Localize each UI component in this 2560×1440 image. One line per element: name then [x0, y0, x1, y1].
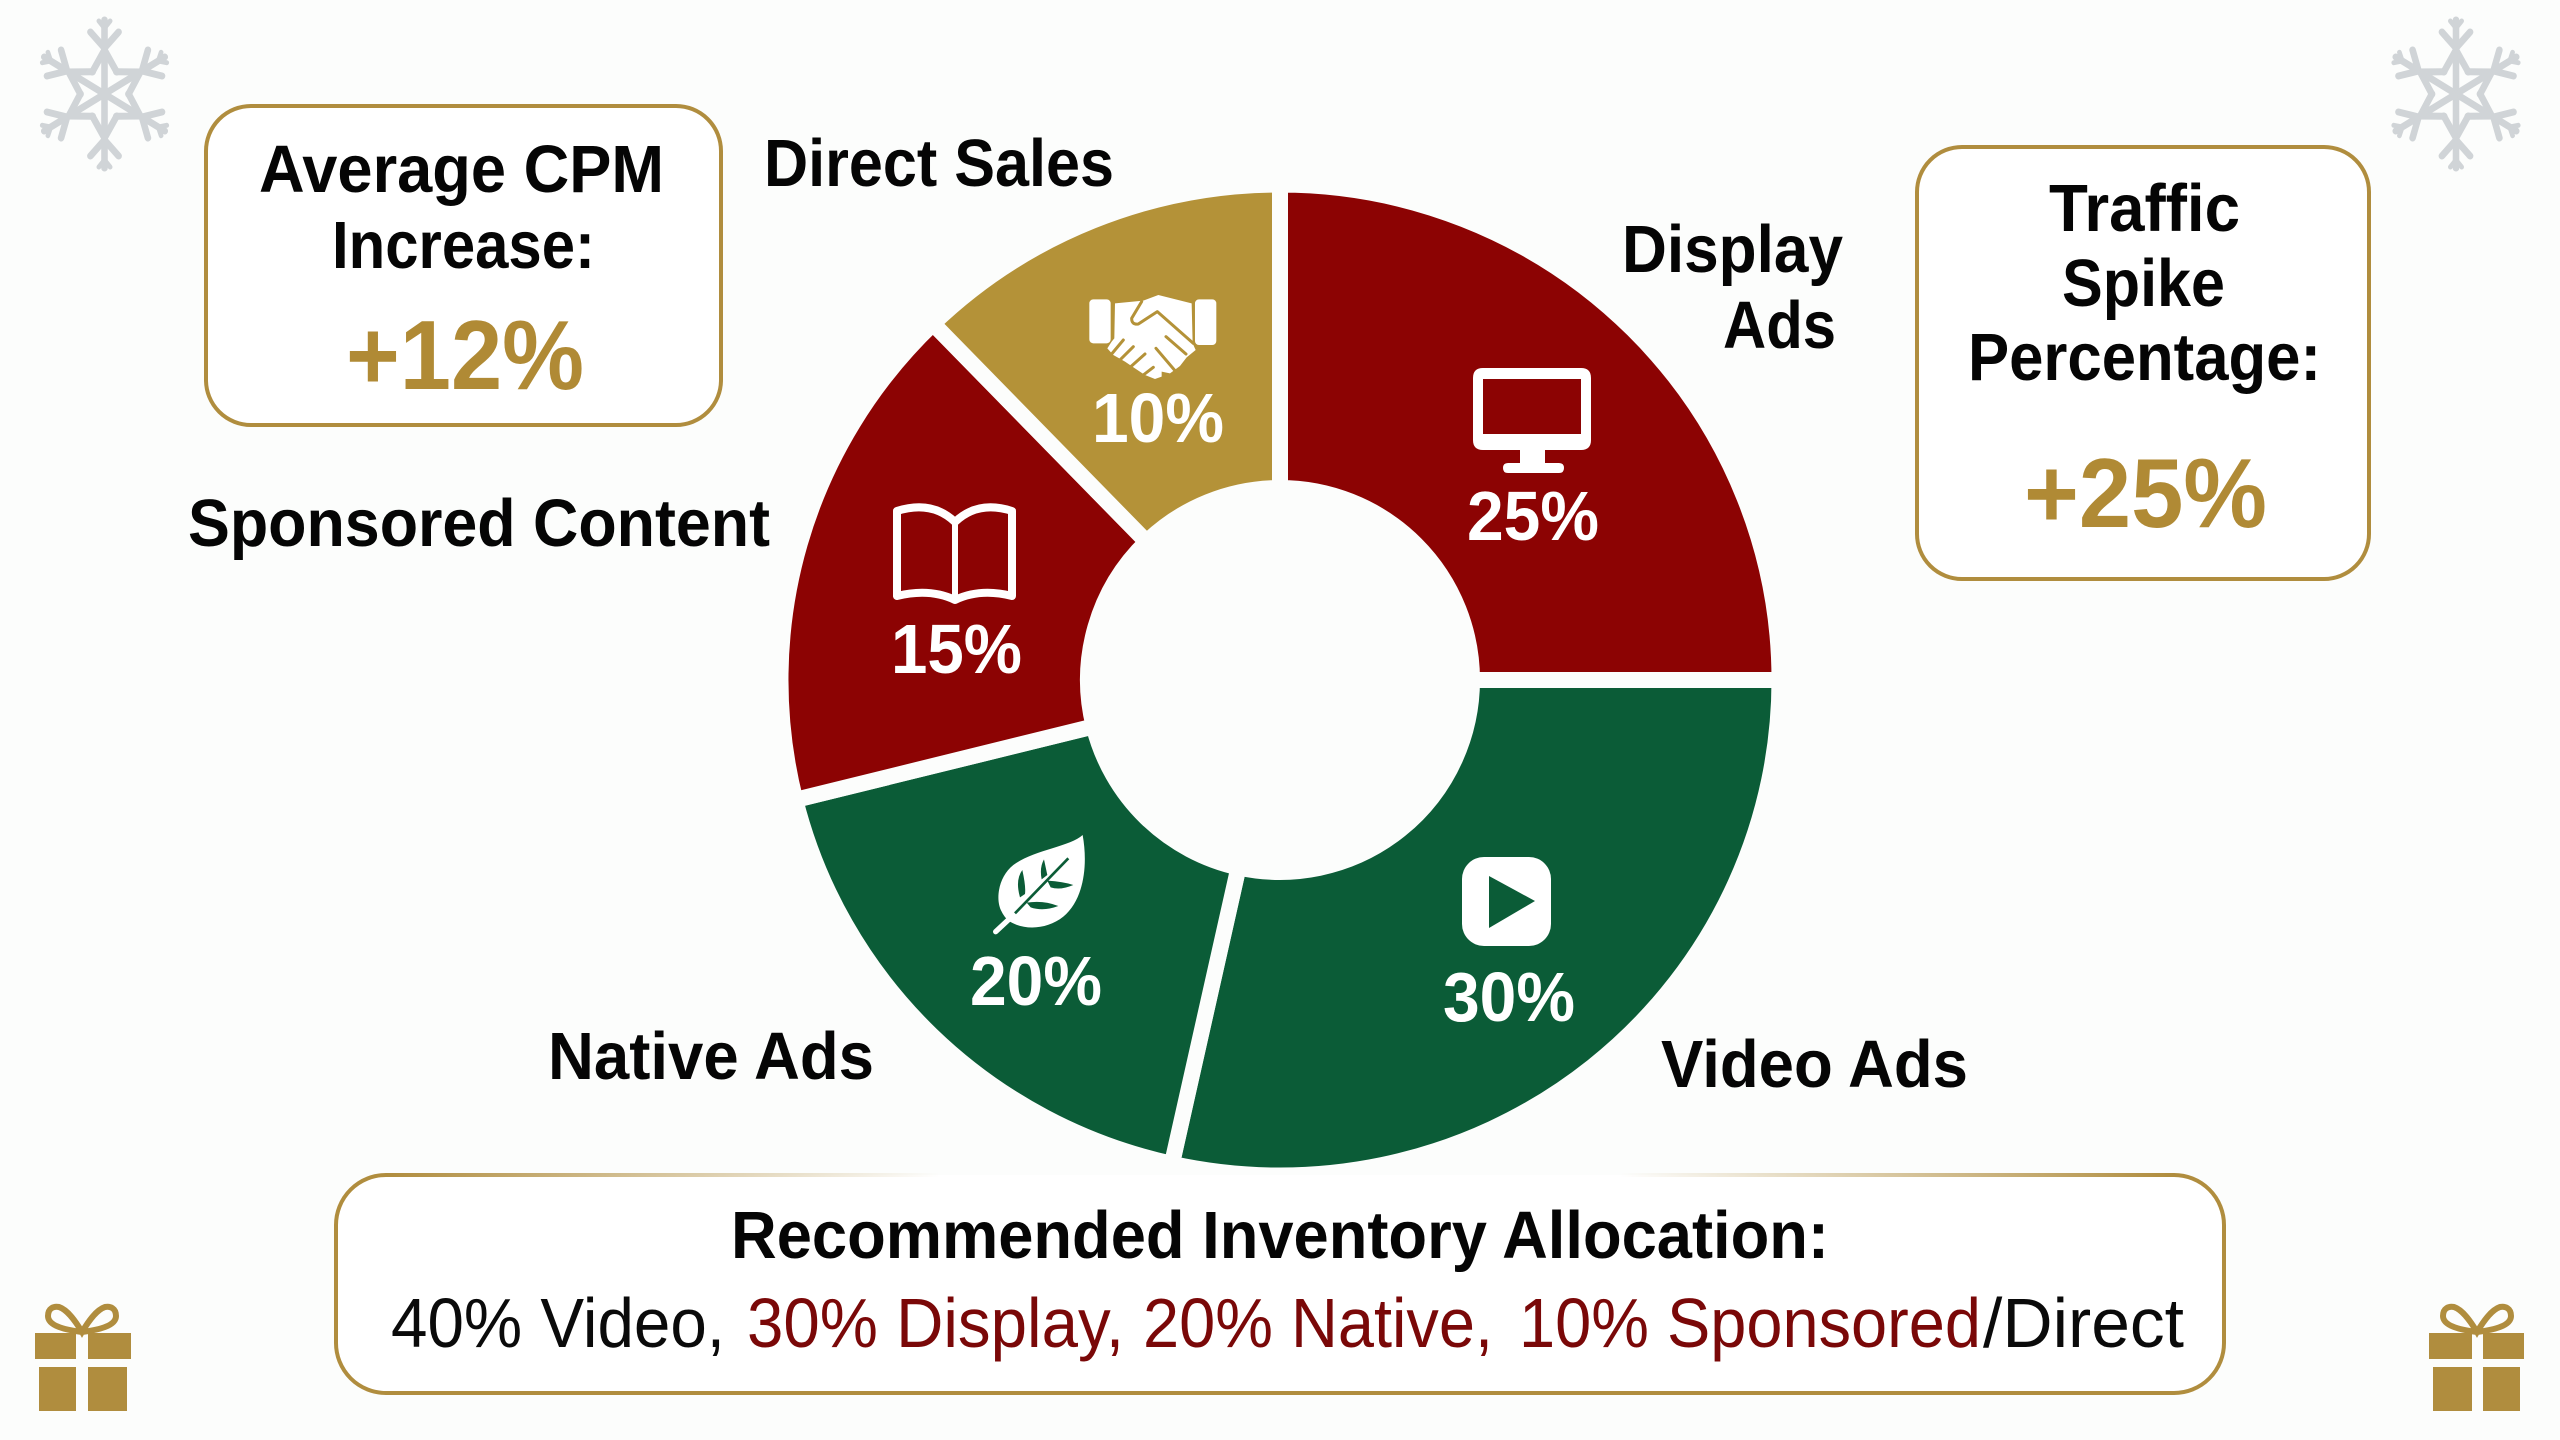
value: +25%: +25% [2024, 438, 2267, 548]
heading: spike: Spike [2062, 246, 2225, 321]
label: native ads: Native Ads [548, 1019, 874, 1094]
icon: gift bottom right [2429, 1307, 2524, 1411]
icon: gift bottom left [35, 1307, 131, 1411]
heading: average CPM line 2: Increase: [332, 208, 595, 283]
segment: native ads 20% [795, 726, 1238, 1164]
value: 20%: 20% [970, 942, 1102, 1020]
text: allocation breakdown [391, 1284, 2184, 1362]
panel: traffic spike percentage [1917, 147, 2369, 579]
text: allocation breakdown: 30% Display, [747, 1284, 1124, 1362]
value: +12%: +12% [346, 300, 584, 410]
value: 30%: 30% [1443, 958, 1575, 1036]
icon: monitor [1473, 368, 1591, 473]
value: 15%: 15% [891, 610, 1022, 688]
segment: video ads 30% [1172, 680, 1780, 1176]
panel: recommended inventory allocation [336, 1173, 2224, 1393]
donut chart [780, 184, 1780, 1176]
text: allocation breakdown: /Direct [1983, 1284, 2184, 1362]
heading: recommended inventory allocation: Recommended Inventory Allocation: [731, 1198, 1829, 1273]
heading: average CPM line 1: Average CPM [259, 132, 664, 207]
icon: leaf [996, 835, 1085, 932]
label: sponsored content: Sponsored Content [188, 486, 770, 561]
icon: snowflake top left [37, 20, 172, 168]
text: allocation breakdown: 20% Native, [1143, 1284, 1493, 1362]
label: display ads: Display [1622, 212, 1843, 287]
label: direct sales: Direct Sales [764, 126, 1114, 201]
segment: sponsored content 15% [780, 324, 1147, 800]
value: 25%: 25% [1467, 477, 1599, 555]
icon: open book [897, 507, 1012, 600]
label: display ads [1622, 212, 1843, 363]
value: 10%: 10% [1092, 379, 1224, 457]
heading: percentage: Percentage: [1968, 320, 2321, 395]
label: video ads: Video Ads [1661, 1027, 1968, 1102]
icon: video play [1462, 857, 1551, 946]
icon: snowflake top right [2389, 20, 2523, 168]
icon: handshake [1089, 295, 1216, 379]
segment: display ads 25% [1280, 184, 1780, 680]
text: allocation breakdown: 40% Video, [391, 1284, 725, 1362]
label: display ads: Ads [1723, 288, 1836, 363]
segment: direct sales 10% [933, 184, 1280, 542]
panel: average CPM increase [206, 106, 721, 425]
heading: traffic: Traffic [2049, 171, 2240, 246]
text: allocation breakdown: 10% Sponsored [1519, 1284, 1981, 1362]
